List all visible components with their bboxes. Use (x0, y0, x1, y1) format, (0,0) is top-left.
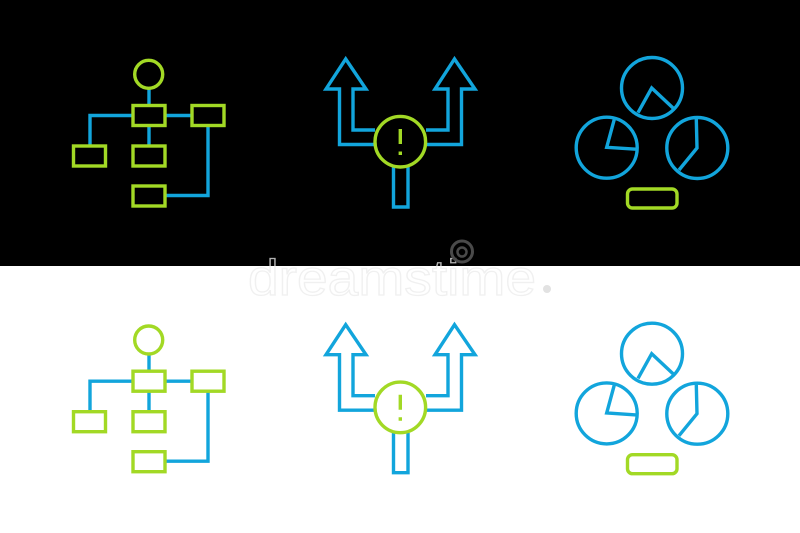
icon: three pie charts on black (576, 58, 728, 208)
icon: split arrows with warning on black (326, 59, 475, 207)
icon: split arrows with warning on white (326, 325, 475, 473)
icon: three pie charts on white (576, 323, 728, 474)
icon: flowchart on black (74, 60, 224, 206)
panel: black top background (0, 0, 800, 266)
panel: white bottom background (0, 266, 800, 533)
icon: flowchart on white (74, 326, 224, 472)
watermark: dreamstime: dreamstime (248, 250, 536, 306)
